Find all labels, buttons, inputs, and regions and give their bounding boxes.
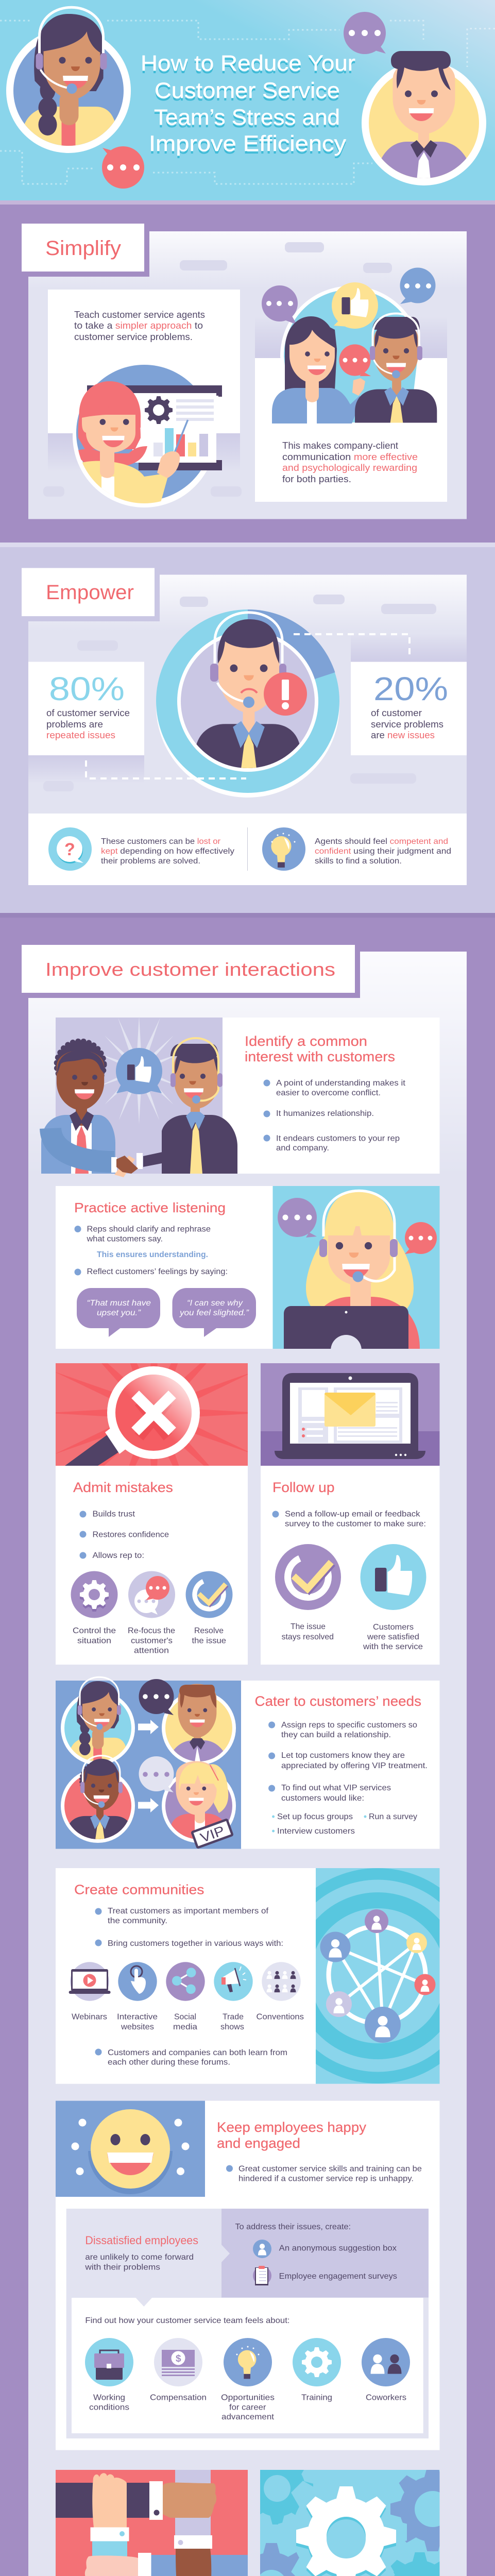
icon: social media: Social [174, 2012, 196, 2022]
card: admit mistakes [56, 1363, 248, 1665]
icon: issue stays resolved: stays resolved [282, 1633, 334, 1641]
simplify right card: and psychologically rewarding [282, 463, 417, 473]
simplify left card [48, 290, 240, 471]
VIP stamp [192, 1820, 232, 1848]
pale bubble [139, 1756, 174, 1792]
purple bubble [262, 285, 298, 325]
panel: empower [22, 568, 467, 885]
VIP stamp: VIP [198, 1823, 227, 1845]
icon: question bubble [48, 827, 92, 871]
simplify left card: Teach customer service agents [74, 310, 205, 320]
stat: 80 percent: 80% [49, 670, 125, 707]
icon: resolve the issue: the issue [192, 1636, 226, 1645]
customer woman [272, 316, 365, 423]
card: admit mistakes: Builds trust [93, 1510, 135, 1518]
empower bottom card: Agents should feel competent and [315, 837, 448, 846]
icon: refocus attention: attention [134, 1647, 169, 1655]
dissatisfied employees box [66, 2209, 429, 2438]
title: How to Reduce Your [141, 51, 355, 76]
card: invest in collaboration technologies [260, 2470, 440, 2576]
card: cater to customers needs: Assign reps to specific customers so [281, 1721, 417, 1730]
dark bubble [139, 1679, 174, 1715]
icon: interactive websites [117, 1962, 158, 2031]
speech box 1 [77, 1288, 160, 1337]
card: follow up: survey to the customer to make sure: [285, 1520, 426, 1529]
stat: 20 percent: 20% [373, 670, 448, 707]
icon: career opportunities: Opportunities [221, 2394, 275, 2402]
donut chart with agent [86, 609, 409, 798]
card: identify a common interest: Identify a common [245, 1033, 367, 1049]
icon: trade shows [214, 1962, 253, 2031]
card: keep employees happy: Great customer service skills and training can be [238, 2165, 422, 2173]
card: practice active listening: Practice active listening [74, 1200, 226, 1215]
stat: 20 percent: of customer [371, 708, 422, 718]
empower bottom card: their problems are solved. [101, 857, 200, 866]
illustration: linked hands [56, 2470, 248, 2576]
dissatisfied employees box: Dissatisfied employees [85, 2234, 198, 2247]
icon: survey clipboard [253, 2266, 271, 2285]
title [141, 51, 355, 159]
illustration: presenter at chart [73, 364, 222, 515]
icon: customers satisfied: were satisfied [367, 1633, 419, 1641]
card: identify a common interest: It humanizes relationship. [276, 1109, 374, 1118]
card: keep employees happy: Keep employees happy [217, 2120, 367, 2135]
card: create communities: Customers and companies can both learn from [108, 2048, 287, 2057]
card: follow up: Follow up [272, 1480, 335, 1495]
empower bottom card: confident using their judgment and [315, 847, 451, 856]
stat: 80 percent: of customer service [46, 708, 130, 718]
card: cater to customers needs: customers would like: [281, 1794, 364, 1803]
stat: 80 percent: repeated issues [46, 730, 115, 740]
empower bottom card: kept depending on how effectively [101, 847, 234, 856]
icon: working conditions: conditions [89, 2403, 129, 2412]
icon: compensation [150, 2338, 207, 2402]
icon: resolve the issue: Resolve [194, 1626, 224, 1635]
card: create communities: the community. [108, 1917, 167, 1925]
card: keep employees happy: and engaged [217, 2136, 300, 2151]
card: admit mistakes: Restores confidence [93, 1531, 169, 1539]
card: practice active listening: This ensures understanding. [97, 1250, 208, 1259]
illustration: smiley [56, 2101, 205, 2197]
icon: conventions: Conventions [257, 2012, 304, 2022]
simplify right card: communication more effective [282, 452, 418, 462]
icon: career opportunities: for career [229, 2403, 266, 2412]
card: identify a common interest [41, 1016, 440, 1177]
speech box 2: you feel slighted.” [179, 1309, 249, 1317]
illustration: handshake [41, 1016, 237, 1177]
customer 2 VIP [162, 1761, 236, 1844]
improve heading tab: Improve customer interactions [45, 959, 335, 980]
simplify left card: customer service problems. [74, 332, 193, 342]
card: follow up: Send a follow-up email or feedback [285, 1510, 421, 1518]
icon: interactive websites: websites [121, 2023, 154, 2031]
icon: customers satisfied: with the service [363, 1642, 423, 1651]
icon: social media [166, 1962, 205, 2031]
speech box 2 [172, 1288, 256, 1337]
card: keep employees happy [56, 2101, 440, 2450]
icon: control the situation: Control the [73, 1626, 116, 1635]
title: Team’s Stress and [154, 105, 340, 130]
card: cater to customers needs: they can build a relationship. [281, 1731, 391, 1739]
header banner [0, 0, 495, 200]
speech box 2: “I can see why [187, 1299, 243, 1308]
speech box 1: “That must have [87, 1299, 151, 1308]
coral bubble [405, 1222, 437, 1254]
title: Customer Service [155, 81, 340, 106]
card: create communities: Treat customers as important members of [108, 1907, 269, 1916]
icon: compensation: $ [176, 2353, 181, 2364]
speech bubble: purple [344, 12, 386, 54]
icon: training: Training [301, 2394, 332, 2402]
person: agent with braid [6, 7, 131, 153]
dissatisfied employees box: Find out how your customer service team feels about: [85, 2316, 289, 2325]
illustration: gears [260, 2470, 440, 2576]
icon: social media: media [173, 2023, 197, 2031]
icon: training [293, 2338, 341, 2402]
card: cater to customers needs: appreciated by offering VIP treatment. [281, 1761, 428, 1770]
icon: refocus attention [128, 1571, 175, 1655]
card: inspire team spirit [56, 2470, 248, 2576]
icon: light bulb [262, 827, 305, 871]
title: Improve Efficiency [149, 131, 347, 156]
icon: webinars [69, 1962, 111, 2022]
icon: issue stays resolved: The issue [291, 1622, 326, 1631]
title: Improve Efficiency [149, 134, 347, 159]
arrows [138, 1720, 159, 1812]
stat: 20 percent: service problems [371, 719, 443, 730]
icon: customers satisfied [361, 1544, 426, 1651]
card: practice active listening [56, 1186, 440, 1366]
title: Customer Service [155, 78, 340, 103]
panel: improve customer interactions [28, 952, 467, 2576]
speech box 1: upset you.” [97, 1309, 141, 1317]
simplify left card: to take a simpler approach to [74, 320, 203, 331]
card: identify a common interest: and company. [276, 1144, 329, 1153]
agent 1 [61, 1677, 135, 1766]
icon: customers satisfied: Customers [373, 1623, 414, 1632]
dissatisfied employees box: Employee engagement surveys [279, 2272, 397, 2281]
stat: 80 percent: problems are [46, 719, 103, 730]
card: cater to customers needs: Cater to customers’ needs [254, 1693, 421, 1709]
purple bubble [278, 1198, 317, 1238]
icon: working conditions [85, 2338, 133, 2412]
stat: 20 percent: are new issues [371, 730, 435, 740]
agent man [355, 313, 437, 423]
dissatisfied employees box: An anonymous suggestion box [279, 2244, 397, 2252]
dissatisfied employees box: To address their issues, create: [235, 2223, 351, 2231]
illustration: network [316, 1868, 440, 2083]
simplify heading tab: Simplify [45, 237, 121, 260]
icon: issue stays resolved [275, 1544, 341, 1641]
illustration: blonde agent with laptop [284, 1191, 420, 1366]
speech bubble: coral [102, 146, 144, 189]
card: create communities [56, 1868, 440, 2084]
icon: webinars: Webinars [72, 2012, 107, 2022]
improve heading tab [22, 945, 355, 993]
card: identify a common interest: interest with customers [245, 1049, 395, 1064]
card: keep employees happy: hindered if a customer service rep is unhappy. [238, 2175, 414, 2183]
stat: 20 percent [351, 662, 467, 755]
empower bottom card [28, 814, 467, 885]
card: create communities: Create communities [74, 1882, 204, 1897]
empower heading tab: Empower [46, 581, 134, 604]
card: practice active listening: what customers say. [86, 1235, 163, 1244]
card: cater to customers needs: Run a survey [369, 1812, 417, 1821]
icon: trade shows: shows [220, 2023, 244, 2031]
card: create communities: each other during these forums. [108, 2058, 230, 2067]
simplify right card: for both parties. [282, 474, 351, 484]
card: cater to customers needs [56, 1677, 440, 1849]
card: cater to customers needs: Let top customers know they are [281, 1751, 405, 1760]
icon: resolve the issue [185, 1571, 233, 1645]
icon: career opportunities [221, 2338, 275, 2421]
icon: refocus attention: customer's [131, 1636, 173, 1645]
title: Team’s Stress and [154, 108, 340, 132]
dissatisfied employees box: with their problems [84, 2263, 160, 2272]
icon: interactive websites: Interactive [117, 2012, 158, 2022]
empower heading tab [22, 568, 155, 616]
coral bubble [339, 344, 371, 376]
title: How to Reduce Your [141, 54, 355, 78]
icon: control the situation [71, 1571, 117, 1645]
thumbs-up bubble [332, 282, 378, 329]
blue bubble [400, 268, 436, 304]
icon: refocus attention: Re-focus the [128, 1626, 175, 1635]
icon: coworkers: Coworkers [366, 2394, 406, 2402]
icon: suggestion box [253, 2240, 271, 2258]
illustration: laptop with envelope [261, 1363, 440, 1466]
card: follow up [261, 1363, 440, 1665]
card: admit mistakes: Admit mistakes [73, 1480, 173, 1495]
empower bottom card: skills to find a solution. [315, 857, 402, 866]
agent 2 [61, 1756, 135, 1843]
simplify heading tab [22, 224, 144, 272]
icon: working conditions: Working [93, 2394, 125, 2402]
card: cater to customers needs: Interview customers [277, 1827, 355, 1836]
card: cater to customers needs: To find out what VIP services [281, 1784, 391, 1792]
empower bottom card: These customers can be lost or [101, 837, 220, 846]
dissatisfied employees box: are unlikely to come forward [85, 2253, 194, 2262]
person: customer in yellow circle [362, 51, 486, 185]
icon: compensation: Compensation [150, 2394, 207, 2402]
icon: coworkers [362, 2338, 410, 2402]
alert bubble [264, 672, 307, 716]
icon: trade shows: Trade [223, 2012, 244, 2022]
card: admit mistakes: Allows rep to: [93, 1551, 144, 1560]
illustration: magnifier with X [56, 1363, 248, 1466]
card: create communities: Bring customers together in various ways with: [108, 1939, 283, 1948]
panel: simplify [22, 224, 467, 519]
card: practice active listening: Reps should clarify and rephrase [87, 1225, 211, 1233]
card: identify a common interest: A point of understanding makes it [276, 1079, 406, 1088]
customer 1 [162, 1684, 236, 1765]
simplify right card: This makes company-client [282, 440, 398, 451]
card: identify a common interest: It endears customers to your rep [276, 1134, 400, 1143]
card: cater to customers needs: Set up focus groups [277, 1812, 353, 1821]
card: identify a common interest: easier to overcome conflict. [276, 1089, 381, 1097]
card: practice active listening: Reflect customers’ feelings by saying: [87, 1267, 228, 1276]
icon: career opportunities: advancement [221, 2413, 275, 2421]
stat: 80 percent [28, 662, 144, 755]
simplify right card [255, 317, 447, 502]
icon: conventions [257, 1962, 304, 2022]
icon: question bubble: ? [64, 840, 75, 859]
icon: control the situation: situation [77, 1636, 111, 1645]
illustration: customer and agent [262, 268, 437, 423]
